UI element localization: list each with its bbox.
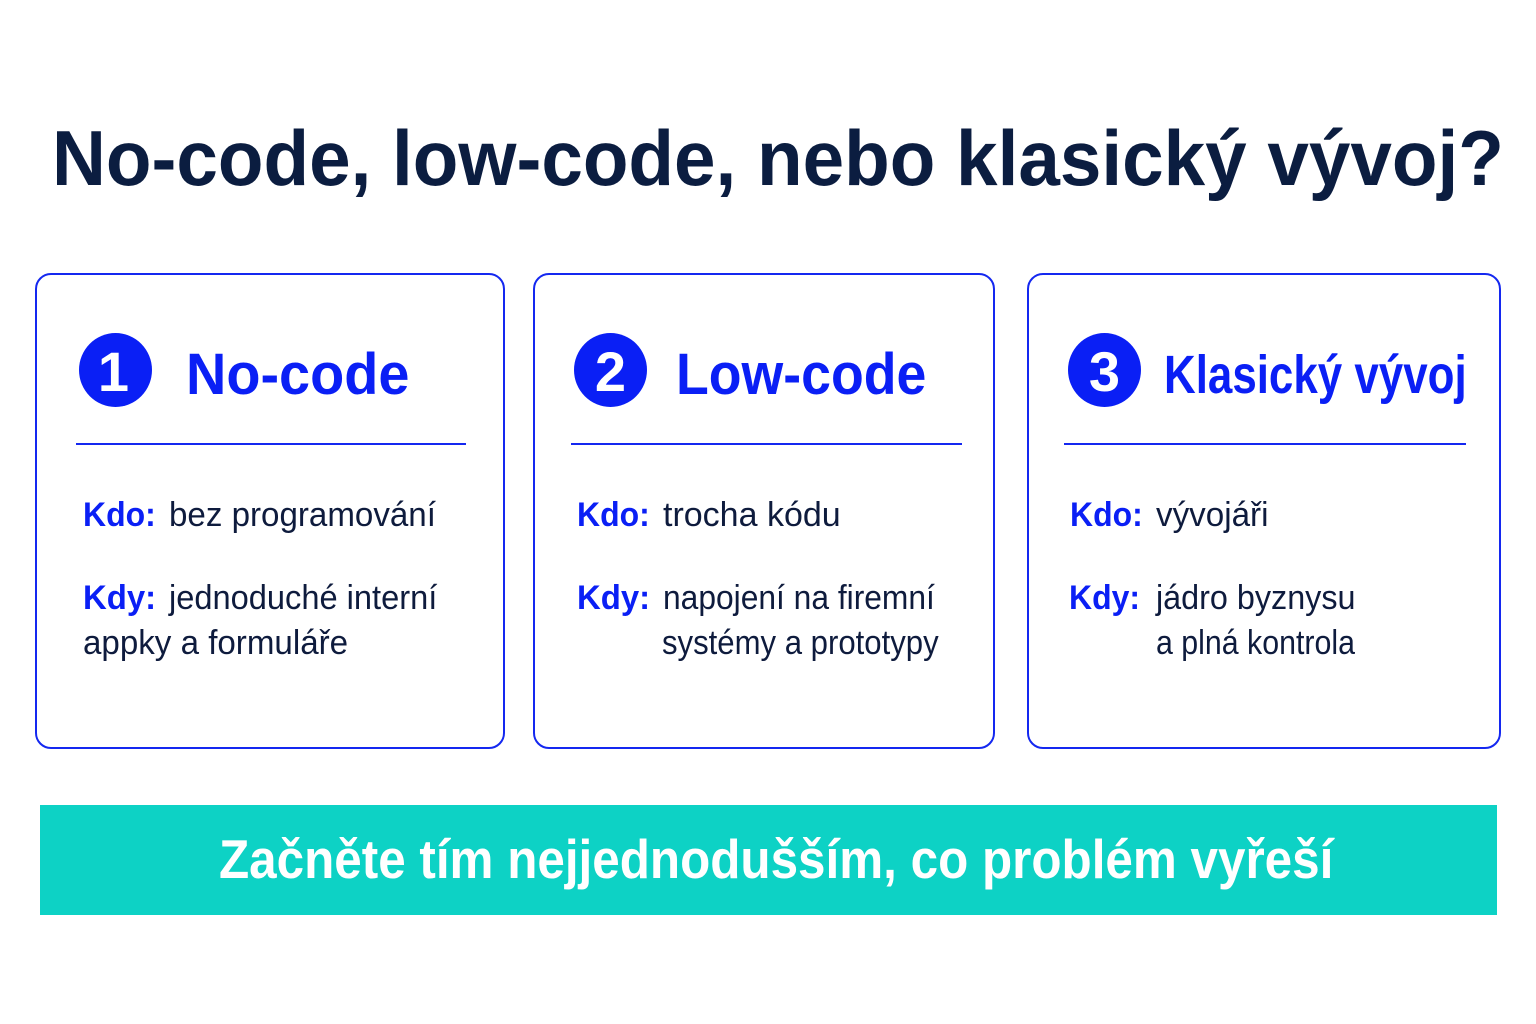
- text: kdy 2 line 1: napojení na firemní: [663, 579, 935, 617]
- heading: no-code: No-code: [186, 342, 409, 407]
- icon: number 1: 1: [98, 340, 129, 403]
- text: kdo 3: vývojáři: [1156, 496, 1268, 534]
- text: kdy 1 line 2: appky a formuláře: [83, 624, 348, 662]
- label: kdo 1: Kdo:: [83, 496, 156, 534]
- title: No-code, low-code, nebo klasický vývoj?: [52, 114, 1504, 202]
- callout text: Začněte tím nejjednodušším, co problém vyřeší: [219, 828, 1333, 890]
- text: kdo 2: trocha kódu: [663, 496, 841, 534]
- text: kdy 1 line 1: jednoduché interní: [169, 579, 437, 617]
- icon: number 3: 3: [1089, 340, 1120, 403]
- text: kdo 1: bez programování: [169, 496, 436, 534]
- label: kdy 2: Kdy:: [577, 579, 650, 617]
- icon: number 2: 2: [595, 340, 626, 403]
- text: kdy 3 line 1: jádro byznysu: [1156, 579, 1356, 617]
- label: kdo 2: Kdo:: [577, 496, 650, 534]
- icon: number 2: [574, 333, 647, 407]
- text: kdy 3 line 2: a plná kontrola: [1156, 624, 1355, 662]
- label: kdy 1: Kdy:: [83, 579, 156, 617]
- text: kdy 2 line 2: systémy a prototypy: [662, 624, 939, 662]
- heading: klasický vývoj: Klasický vývoj: [1164, 345, 1467, 405]
- panel: klasický vývoj: [1027, 273, 1501, 749]
- heading: low-code: Low-code: [676, 342, 926, 407]
- icon: number 3: [1068, 333, 1141, 407]
- callout banner: [40, 805, 1497, 915]
- panel: low-code: [533, 273, 995, 749]
- label: kdo 3: Kdo:: [1070, 496, 1143, 534]
- panel: no-code: [35, 273, 505, 749]
- icon: number 1: [79, 333, 152, 407]
- label: kdy 3: Kdy:: [1069, 579, 1140, 617]
